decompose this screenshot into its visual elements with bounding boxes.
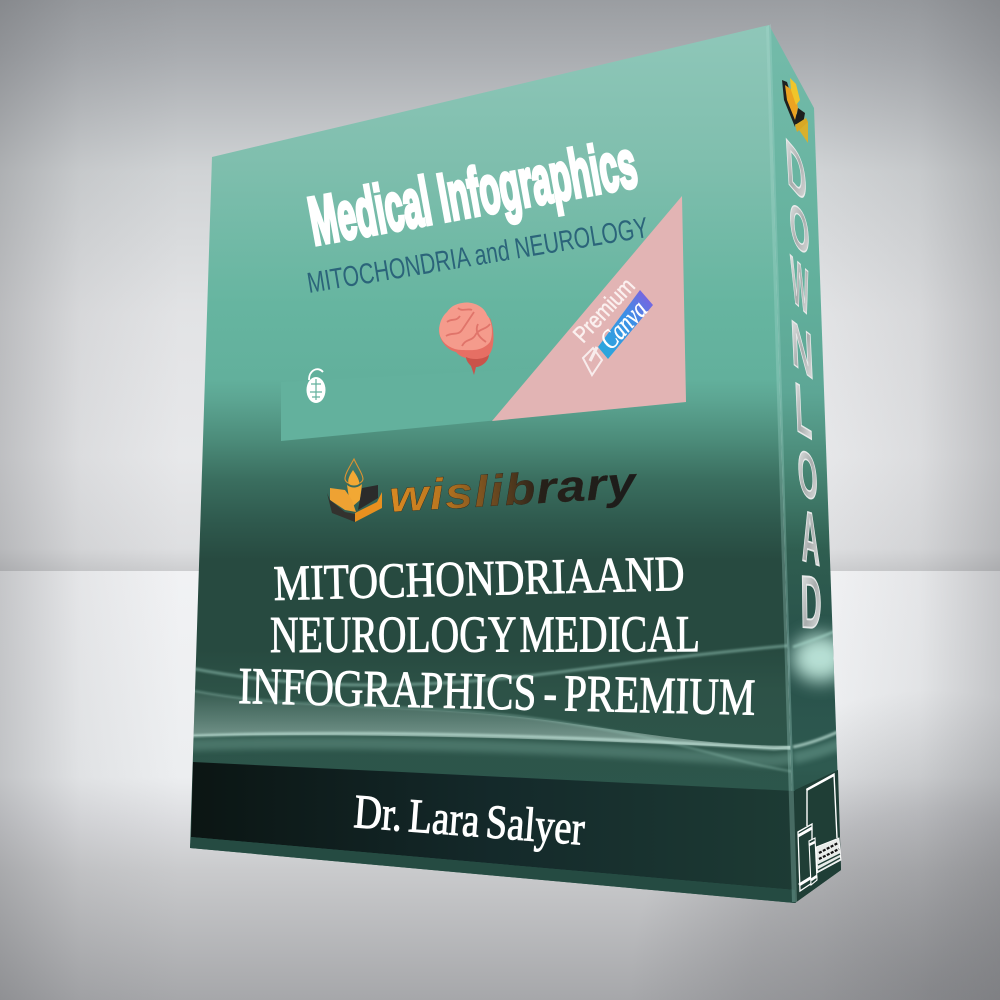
logo left wing bbox=[327, 493, 355, 522]
logo right wing bbox=[355, 492, 382, 522]
cover artwork lower edge bbox=[281, 360, 686, 441]
icon: small phone bbox=[809, 838, 817, 885]
side device icons bbox=[798, 774, 841, 891]
side text: DOWNLOAD bbox=[783, 122, 822, 644]
canva badge: Canva bbox=[593, 294, 653, 355]
side text: DOWNLOAD: O bbox=[788, 188, 811, 272]
front-side edge highlight bbox=[766, 24, 797, 902]
dark side panel bbox=[795, 770, 841, 903]
side text: DOWNLOAD: N bbox=[789, 306, 815, 395]
side logo bbox=[782, 78, 808, 143]
logo left page bbox=[330, 488, 356, 512]
product title bbox=[238, 545, 756, 727]
side text: DOWNLOAD: D bbox=[783, 122, 809, 221]
logo wordmark: wislibrary bbox=[388, 458, 640, 522]
product box bbox=[190, 24, 848, 903]
side text: DOWNLOAD: D bbox=[800, 560, 822, 644]
light waves on side bbox=[792, 628, 848, 758]
premium label: Premium bbox=[568, 273, 640, 347]
title line 2: NEUROLOGY MEDICAL bbox=[270, 606, 700, 664]
logo figure bbox=[347, 484, 362, 506]
dark author band bbox=[191, 762, 795, 890]
title line 3: INFOGRAPHICS - PREMIUM bbox=[238, 658, 756, 727]
icon: phone bbox=[798, 824, 812, 891]
product box: Medical Infographics bbox=[303, 126, 642, 260]
box front face bbox=[190, 25, 795, 903]
author name: Dr. Lara Salyer bbox=[352, 785, 587, 856]
side text: DOWNLOAD: L bbox=[793, 367, 813, 455]
pink corner triangle bbox=[492, 196, 686, 421]
logo: wislibrary bbox=[327, 458, 640, 522]
background: studio wall bbox=[0, 0, 1000, 571]
title line 1: MITOCHONDRIA AND bbox=[273, 545, 685, 611]
side text: DOWNLOAD: A bbox=[800, 493, 820, 582]
icon: brain bbox=[439, 303, 494, 375]
side text: DOWNLOAD: O bbox=[796, 433, 819, 518]
logo flame outline bbox=[345, 459, 363, 484]
side text: DOWNLOAD: W bbox=[789, 240, 811, 332]
icon: laptop keyboard bbox=[816, 838, 841, 873]
icon: tablet top bar bbox=[806, 775, 834, 790]
logo right page bbox=[358, 485, 378, 510]
icon: tablet bbox=[807, 774, 837, 838]
bottom strip bbox=[190, 837, 795, 903]
icon: small white brain logo bbox=[306, 369, 326, 403]
box side face bbox=[769, 25, 841, 903]
logo flame bbox=[348, 470, 359, 486]
icon: pencil check box bbox=[583, 347, 602, 375]
light waves on front bbox=[190, 645, 795, 772]
cover subtitle: MITOCHONDRIA and NEUROLOGY bbox=[305, 212, 651, 300]
background: floor bbox=[0, 571, 1000, 1000]
floor shadow right of box bbox=[630, 690, 1000, 1000]
